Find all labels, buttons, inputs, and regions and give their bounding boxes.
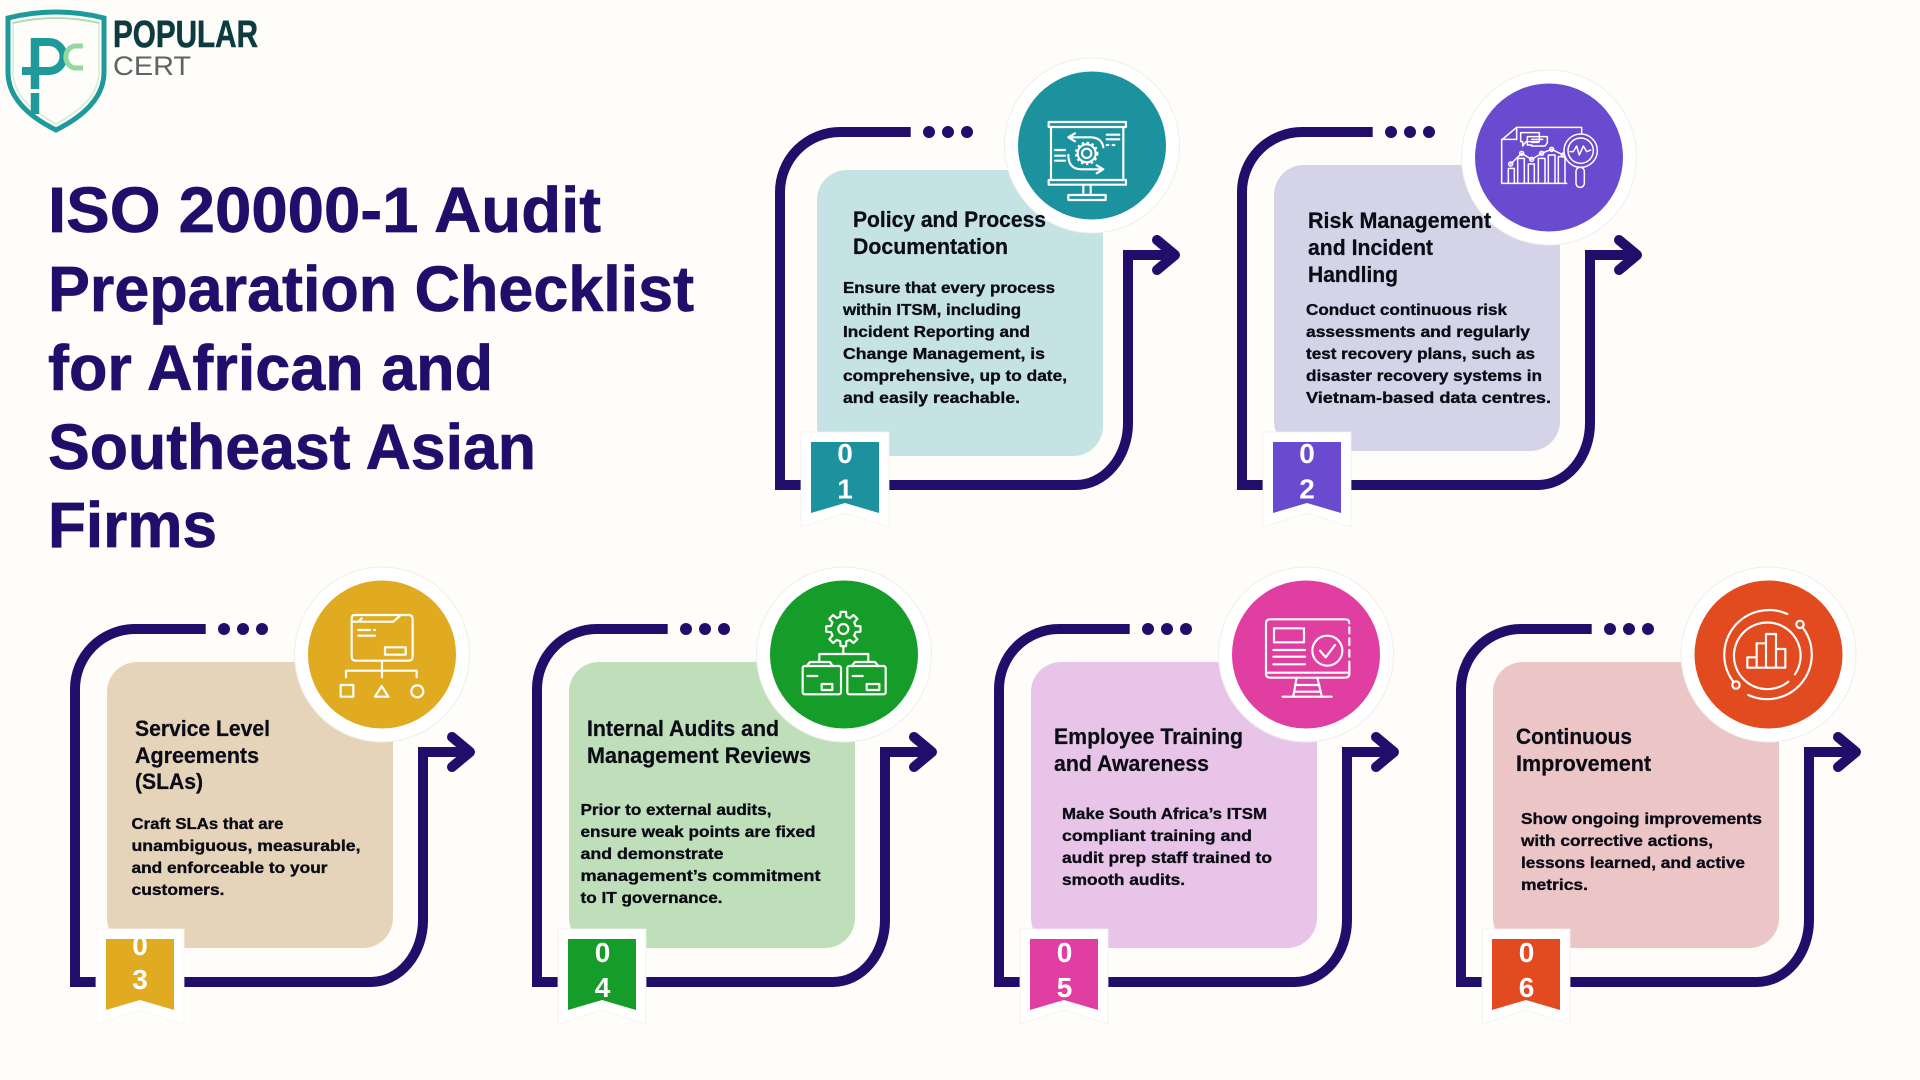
arrow track 6 (1461, 623, 1856, 982)
number badge 06: 6 (1519, 972, 1534, 1003)
text block: card 3: Craft SLAs that are (132, 816, 284, 833)
text block: card 5 (1062, 806, 1272, 889)
number badge 02 (1263, 432, 1351, 527)
logo: Popular Cert (8, 12, 258, 130)
heading: card 2: and Incident (1308, 235, 1433, 260)
card 2: Risk Management and Incident Handling (1242, 70, 1637, 527)
card 1: Policy and Process Documentation (780, 58, 1180, 527)
number badge 03: 3 (132, 964, 148, 995)
number badge 01: 0 (837, 438, 853, 469)
number badge 01: 1 (837, 474, 853, 504)
text block: card 5: audit prep staff trained to (1062, 850, 1272, 867)
number badge 06: 0 (1519, 937, 1534, 968)
text block: card 3: unambiguous, measurable, (132, 838, 360, 855)
panel: card 3 background (107, 662, 393, 948)
text block: card 6: Show ongoing improvements (1521, 811, 1762, 828)
heading: card 3 (135, 716, 270, 794)
heading: card 3: Service Level (135, 716, 270, 741)
panel: card 6 background (1493, 662, 1779, 948)
heading: card 4: Internal Audits and (587, 716, 779, 741)
text block: card 6: metrics. (1521, 877, 1588, 894)
title (48, 174, 694, 561)
card 4: Internal Audits and Management Reviews (537, 567, 932, 1024)
heading: card 6 (1516, 724, 1651, 776)
heading: card 3: Agreements (135, 743, 259, 768)
text block: card 3 (132, 816, 360, 899)
text block: card 1: within ITSM, including (842, 302, 1021, 319)
logo wordmark: POPULAR (113, 14, 258, 56)
text block: card 2: Vietnam-based data centres. (1306, 390, 1551, 407)
icon: presentation screen with gear (1004, 58, 1180, 233)
text block: card 1: comprehensive, up to date, (843, 368, 1067, 385)
text block: card 1: Ensure that every process (843, 280, 1055, 297)
heading: card 6: Improvement (1516, 751, 1651, 776)
number badge 04: 4 (595, 972, 611, 1003)
heading: card 1 (853, 207, 1046, 259)
panel: card 4 background (569, 662, 855, 948)
heading: card 3: (SLAs) (135, 769, 203, 794)
text block: card 4 (580, 802, 821, 907)
card 6: Continuous Improvement (1461, 567, 1856, 1024)
panel: card 1 background (817, 170, 1103, 456)
icon: folder hierarchy (294, 567, 470, 742)
text block: card 4: to IT governance. (580, 890, 722, 907)
number badge 04 (558, 929, 646, 1024)
heading: card 6: Continuous (1516, 724, 1632, 749)
panel: card 2 background (1274, 165, 1560, 451)
text block: card 2: disaster recovery systems in (1306, 368, 1542, 385)
card 3: Service Level Agreements (75, 567, 470, 1024)
text block: card 2 (1306, 302, 1551, 407)
heading: card 1: Policy and Process (853, 207, 1046, 232)
heading: card 1: Documentation (853, 234, 1008, 259)
number badge 01 (801, 432, 889, 527)
number badge 03: 0 (132, 930, 148, 961)
heading: card 2 (1308, 208, 1491, 287)
number badge 03 (96, 929, 184, 1024)
text block: card 6: lessons learned, and active (1521, 855, 1745, 872)
text block: card 5: smooth audits. (1062, 872, 1185, 889)
title: Preparation Checklist (48, 253, 694, 325)
heading: card 5: and Awareness (1054, 751, 1209, 776)
heading: card 5 (1054, 724, 1243, 776)
arrow track 5 (999, 623, 1394, 982)
number badge 05: 0 (1057, 937, 1072, 968)
text block: card 5: Make South Africa’s ITSM (1062, 806, 1267, 823)
number badge 02: 2 (1299, 474, 1315, 504)
number badge 05 (1020, 929, 1108, 1024)
title: Southeast Asian (48, 411, 536, 483)
text block: card 4: and demonstrate (580, 846, 724, 863)
logo wordmark (113, 14, 258, 81)
text block: card 2: assessments and regularly (1306, 324, 1530, 341)
number badge 05: 5 (1057, 972, 1072, 1003)
title: ISO 20000-1 Audit (48, 174, 601, 246)
text block: card 6: with corrective actions, (1520, 833, 1713, 850)
number badge 02: 0 (1299, 438, 1315, 469)
text block: card 6 (1520, 811, 1762, 894)
arrow track 1 (780, 126, 1175, 485)
text block: card 1: Change Management, is (843, 346, 1045, 363)
text block: card 2: test recovery plans, such as (1306, 346, 1535, 363)
text block: card 5: compliant training and (1062, 828, 1252, 845)
logo wordmark: CERT (113, 51, 191, 81)
text block: card 3: customers. (132, 882, 224, 899)
text block: card 4: ensure weak points are fixed (580, 824, 816, 841)
card 5: Employee Training and Awareness (999, 567, 1394, 1024)
text block: card 1: and easily reachable. (843, 390, 1020, 407)
icon: gear with folders (756, 567, 932, 742)
icon: circular bar chart (1681, 567, 1856, 742)
number badge 06 (1482, 929, 1570, 1024)
heading: card 5: Employee Training (1054, 724, 1243, 749)
arrow track 3 (75, 623, 470, 982)
heading: card 2: Handling (1308, 262, 1398, 287)
heading: card 4: Management Reviews (587, 743, 811, 768)
panel: card 5 background (1031, 662, 1317, 948)
text block: card 4: management’s commitment (580, 868, 821, 885)
heading: card 4 (587, 716, 811, 768)
title: for African and (48, 332, 493, 404)
text block: card 1: Incident Reporting and (843, 324, 1030, 341)
icon: shield (8, 12, 104, 130)
text block: card 3: and enforceable to your (132, 860, 328, 877)
text block: card 2: Conduct continuous risk (1306, 302, 1507, 319)
number badge 04: 0 (595, 937, 610, 968)
icon: report with magnifier (1462, 70, 1636, 245)
heading: card 2: Risk Management (1308, 208, 1491, 233)
arrow track 2 (1242, 126, 1637, 485)
arrow track 4 (537, 623, 932, 982)
title: Firms (48, 489, 217, 561)
icon: monitor with check (1218, 567, 1394, 742)
text block: card 4: Prior to external audits, (580, 802, 772, 819)
text block: card 1 (842, 280, 1067, 407)
